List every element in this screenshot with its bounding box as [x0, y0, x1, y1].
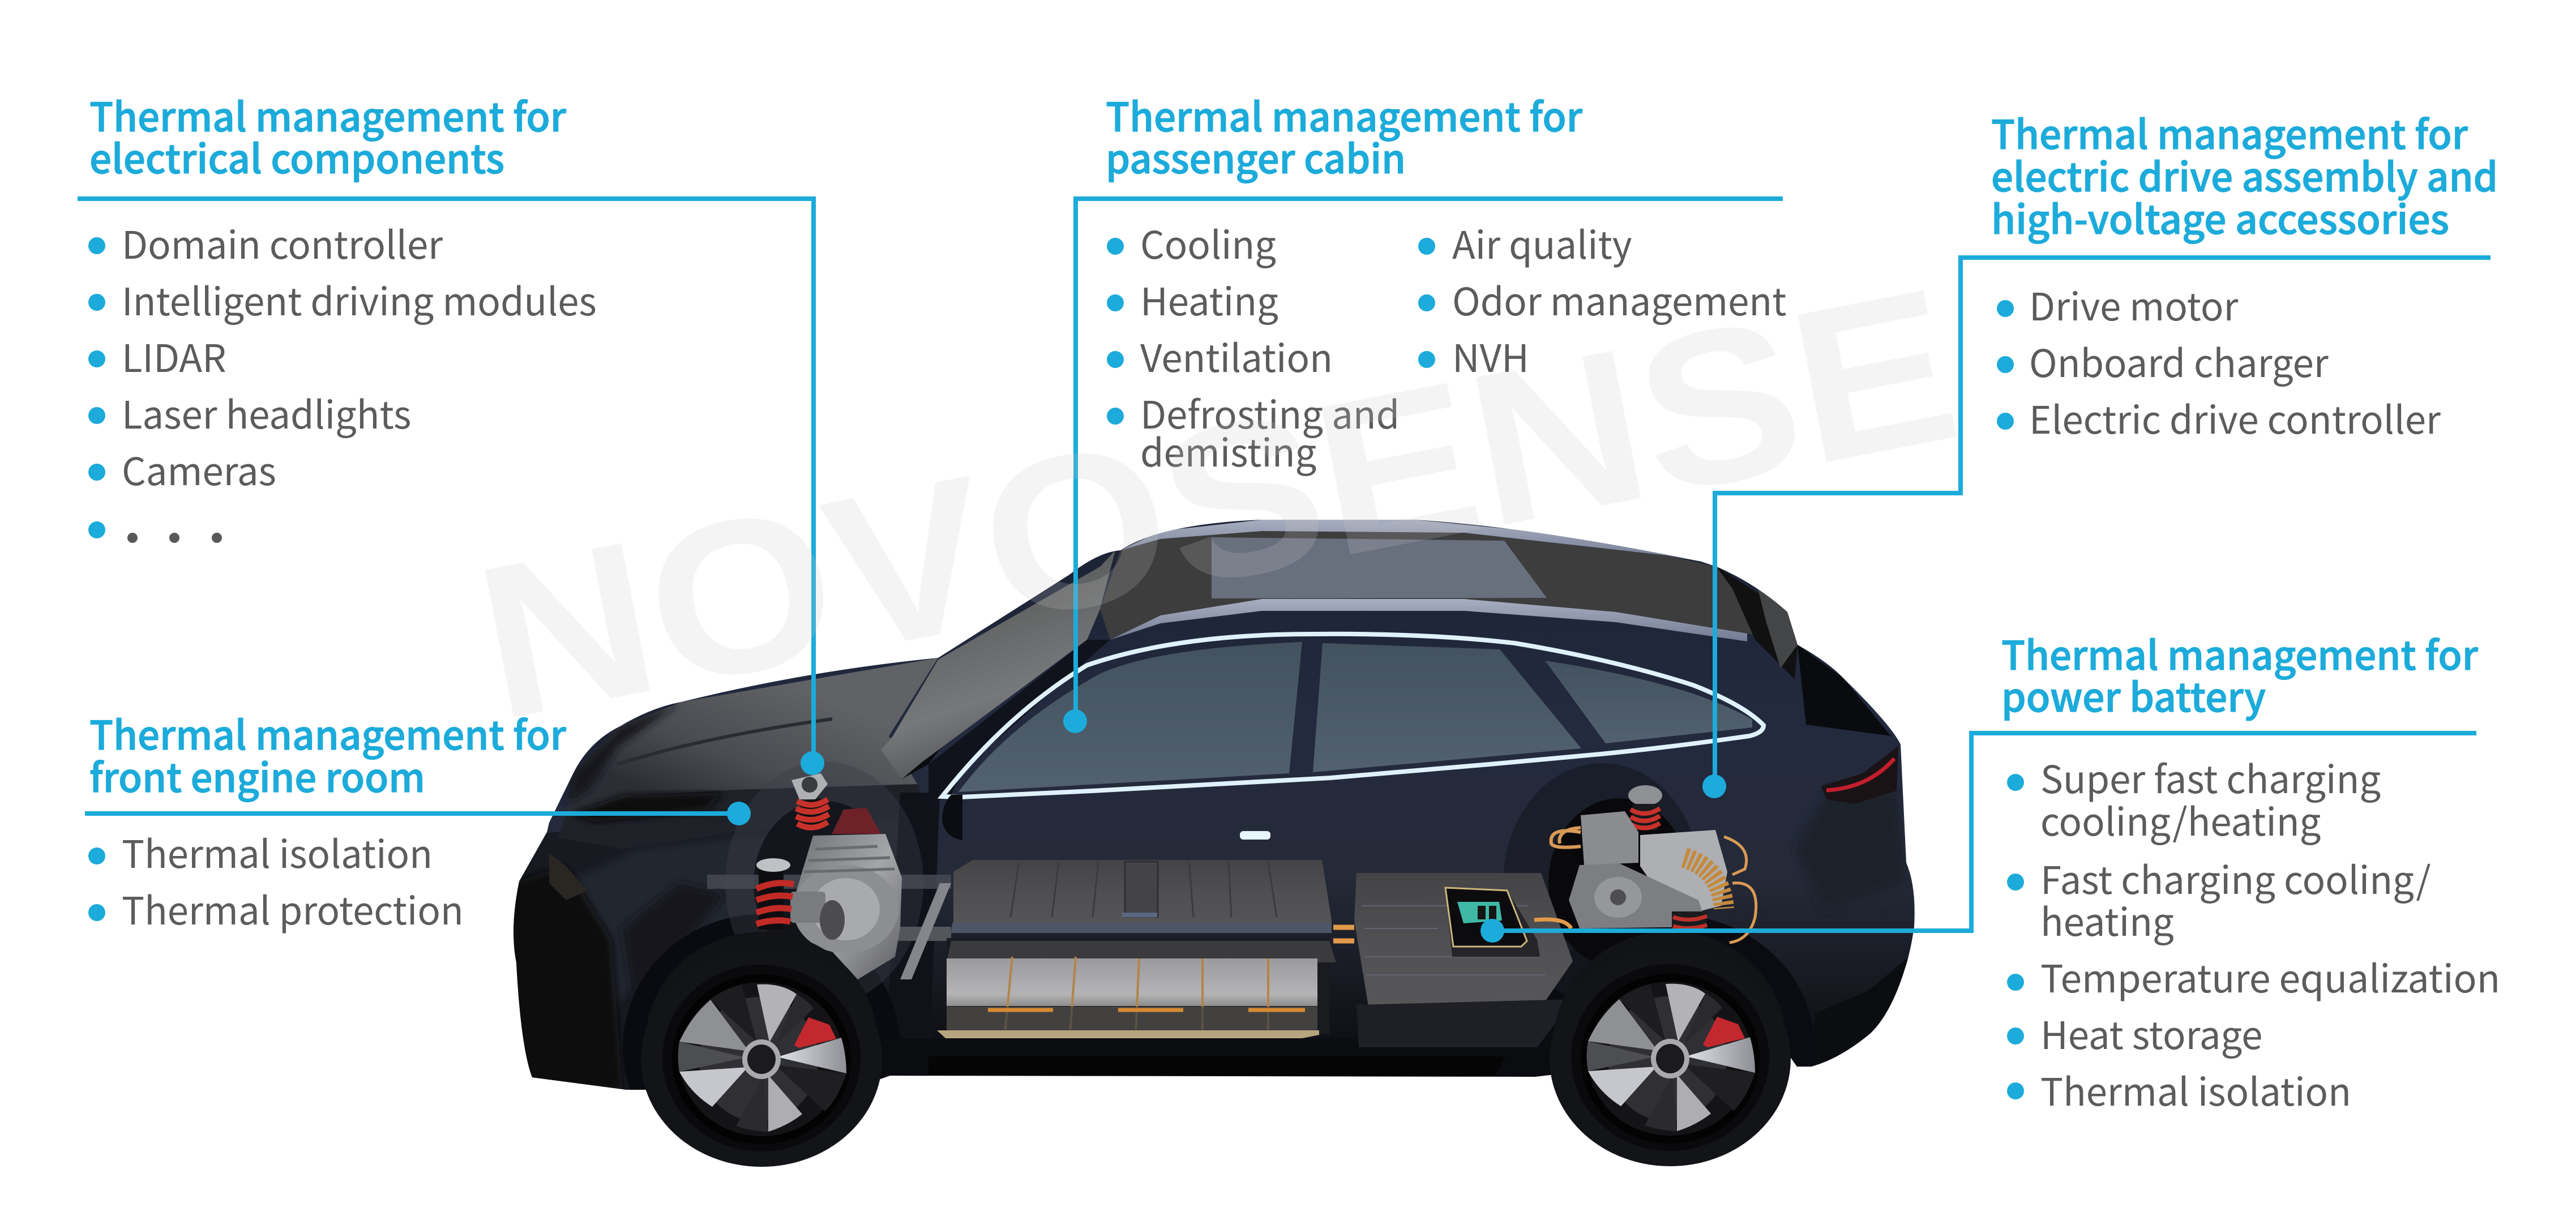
heading: electric drive assembly: Thermal management for [1991, 104, 2468, 161]
wheel wells [623, 914, 900, 1090]
car cutaway illustration [498, 520, 1915, 1180]
list: power battery: cooling/heating [2040, 792, 2321, 847]
side mirror [942, 795, 962, 840]
list: power battery: Super fast charging [2040, 750, 2381, 804]
list: electrical components: LIDAR [122, 328, 226, 383]
list: electric drive assembly: Electric drive controller [2029, 390, 2441, 445]
heading: front engine room: Thermal management for [89, 704, 566, 761]
leader line: power battery [1480, 733, 2476, 943]
heading: electrical components: Thermal management for [89, 86, 566, 143]
panel: passenger cabin [1106, 86, 1786, 478]
heading: electrical components: electrical components [89, 128, 504, 185]
watermark: NOVOSENSE [460, 241, 1974, 765]
list: power battery: Temperature equalization [2040, 949, 2500, 1004]
list: passenger cabin: NVH [1452, 328, 1529, 383]
panel: front engine room [88, 704, 566, 936]
rear drive motor assembly [1551, 785, 1756, 943]
controller module with circuit board [1445, 888, 1571, 957]
list: passenger cabin: Ventilation [1140, 328, 1333, 383]
list: front engine room: Thermal protection [122, 881, 464, 936]
rear wheel [1550, 931, 1791, 1166]
door handle [1240, 831, 1270, 840]
list: passenger cabin: demisting [1140, 423, 1316, 478]
window chrome trim [942, 634, 1764, 797]
list: passenger cabin: Heating [1140, 272, 1278, 327]
list: electric drive assembly: Onboard charger [2029, 333, 2329, 388]
heading: power battery: power battery [2001, 666, 2266, 724]
heading: electric drive assembly [1991, 104, 2498, 246]
battery pack rear module [1354, 873, 1574, 1047]
tail light [1821, 746, 1898, 804]
heading: electrical components [89, 86, 566, 185]
list: passenger cabin [1107, 215, 1786, 478]
heading: power battery: Thermal management for [2001, 624, 2478, 682]
list: front engine room [88, 824, 464, 936]
heading: passenger cabin: Thermal management for [1106, 86, 1582, 143]
list: electrical components: Domain controller [122, 215, 443, 270]
heading: front engine room [89, 704, 566, 804]
list: electrical components: Cameras [122, 442, 276, 496]
heading: power battery [2001, 624, 2478, 724]
list: passenger cabin: Cooling [1140, 215, 1276, 270]
list: passenger cabin: Odor management [1452, 272, 1786, 327]
leader line: passenger cabin [1063, 199, 1783, 733]
leader line: electric drive assembly [1702, 258, 2491, 798]
list: power battery: Heat storage [2040, 1005, 2262, 1060]
list: electrical components: Laser headlights [122, 385, 411, 440]
leader line: electrical components [78, 199, 824, 775]
heading: electric drive assembly: high-voltage accessories [1991, 189, 2449, 246]
leader line: front engine room [85, 802, 751, 825]
list: electrical components: Intelligent driving modules [122, 272, 597, 327]
heading: passenger cabin [1106, 86, 1582, 185]
side windows [958, 642, 1752, 792]
lower sill [883, 1039, 1574, 1076]
ghost tyres [725, 761, 923, 1005]
heading: front engine room: front engine room [89, 747, 425, 804]
list: power battery: Fast charging cooling/ [2040, 850, 2431, 905]
panel: electric drive assembly [1991, 104, 2498, 445]
list: passenger cabin: Air quality [1452, 215, 1632, 270]
list: front engine room: Thermal isolation [122, 824, 433, 879]
panel: electrical components [88, 86, 597, 543]
list: electric drive assembly: Drive motor [2029, 277, 2239, 332]
list: electrical components [88, 215, 597, 543]
battery pack front module [937, 860, 1354, 1038]
list: power battery [2007, 750, 2500, 1117]
car body [514, 520, 1915, 1090]
rear quarter shading [1811, 957, 1909, 1076]
list: power battery: Thermal isolation [2040, 1062, 2351, 1117]
heading: electric drive assembly: electric drive assembly and [1991, 146, 2498, 203]
heading: passenger cabin: passenger cabin [1106, 128, 1406, 185]
front wheel [641, 932, 882, 1167]
list: electric drive assembly [1997, 277, 2441, 445]
panel: power battery [2001, 624, 2500, 1117]
list: passenger cabin: Defrosting and [1140, 385, 1400, 440]
list: power battery: heating [2040, 892, 2174, 947]
front suspension and motor [707, 773, 951, 979]
